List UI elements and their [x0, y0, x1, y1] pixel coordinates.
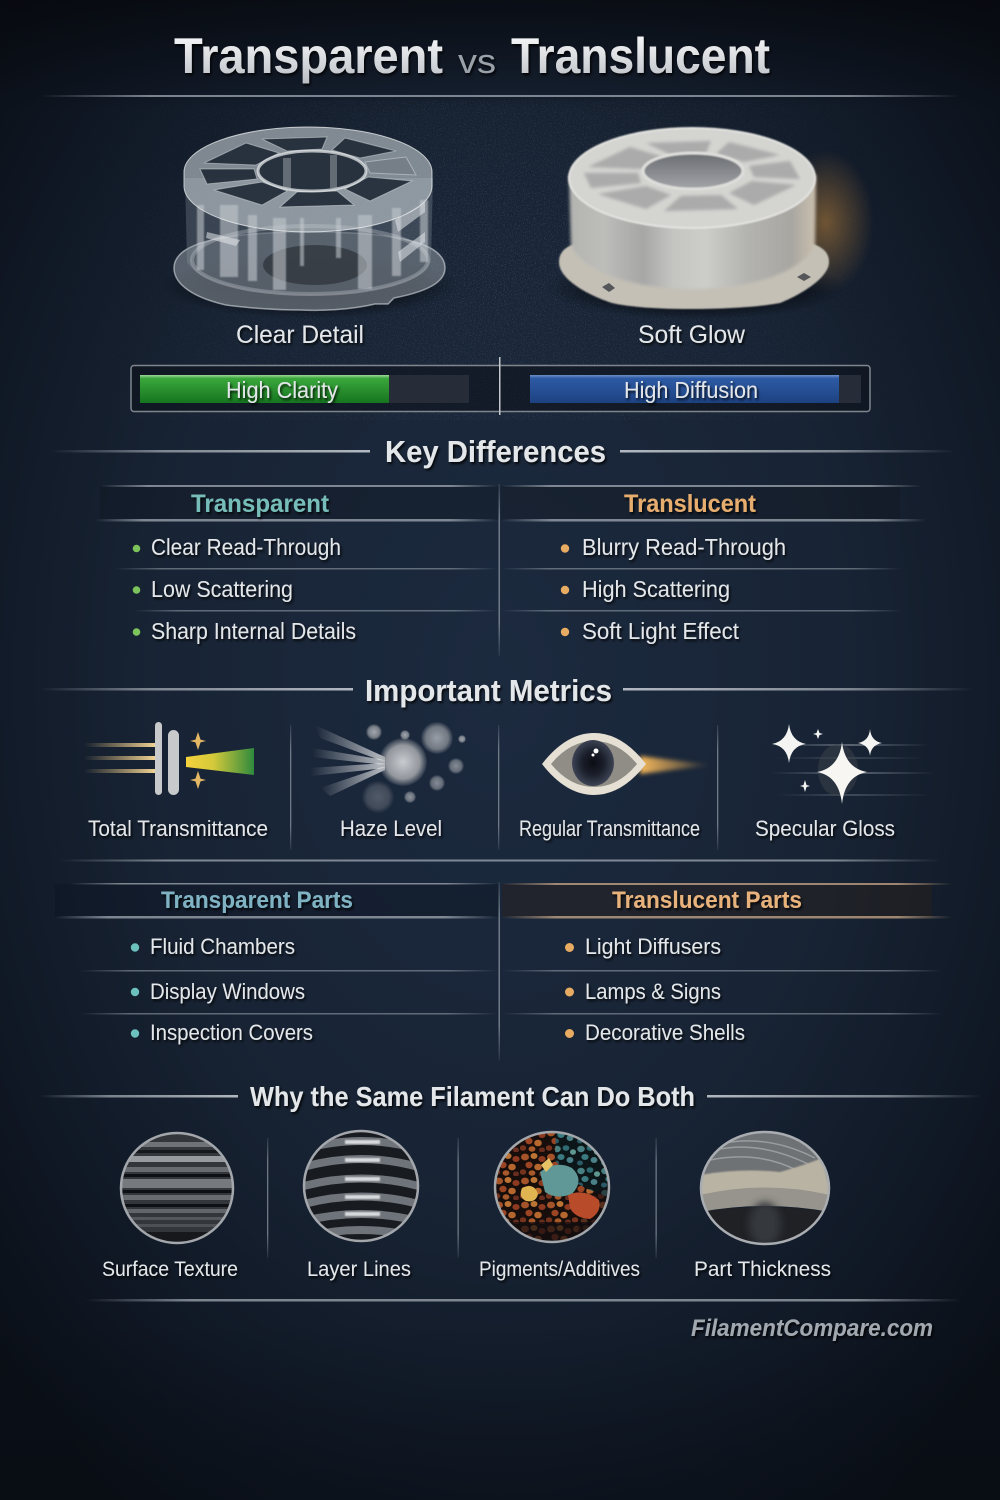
column: transparent parts: Display Windows	[150, 979, 305, 1004]
column: transparent parts: Inspection Covers	[150, 1020, 313, 1045]
high diffusion bar: High Diffusion	[624, 377, 758, 403]
column: translucent: Translucent	[624, 490, 757, 518]
icon: specular gloss	[770, 724, 935, 804]
icon: haze level	[310, 722, 466, 813]
high clarity bar: High Clarity	[226, 377, 338, 403]
label: total transmittance: Total Transmittance	[88, 816, 268, 841]
heading: important metrics: Important Metrics	[365, 673, 612, 708]
column: translucent	[561, 490, 786, 644]
icon: layer lines	[300, 1128, 422, 1244]
product labels	[236, 321, 746, 349]
spool base	[559, 235, 829, 309]
column: translucent parts	[565, 887, 802, 1045]
label: specular gloss: Specular Gloss	[755, 816, 895, 841]
footer brand: FilamentCompare.com	[691, 1315, 933, 1342]
title: Transparent	[174, 28, 443, 84]
icon: regular transmittance eye	[542, 733, 712, 795]
label: surface texture: Surface Texture	[102, 1258, 238, 1281]
product labels: Soft Glow	[638, 321, 746, 349]
spool base flange	[174, 232, 445, 310]
column: translucent: Soft Light Effect	[582, 618, 740, 644]
icon: total transmittance	[84, 722, 254, 795]
transparent spool illustration	[160, 127, 460, 319]
column: transparent	[133, 490, 356, 644]
icon: pigments and additives	[494, 1130, 610, 1244]
column: transparent parts	[131, 887, 353, 1045]
icon: surface texture	[120, 1130, 236, 1246]
heading: why the same filament: Why the Same Filament Can Do Both	[250, 1081, 695, 1112]
label: regular transmittance: Regular Transmittance	[519, 816, 700, 841]
label: haze level: Haze Level	[340, 816, 442, 841]
column: translucent parts: Decorative Shells	[585, 1020, 745, 1045]
spool body	[569, 175, 816, 289]
icon: part thickness	[700, 1130, 830, 1250]
label: layer lines: Layer Lines	[307, 1258, 411, 1281]
label: part thickness: Part Thickness	[694, 1258, 831, 1281]
spool top lattice	[184, 127, 432, 232]
high diffusion bar	[530, 375, 861, 403]
column: transparent: Low Scattering	[151, 576, 293, 602]
spool transparent body	[185, 178, 433, 295]
column: translucent parts: Lamps & Signs	[585, 979, 721, 1004]
title: Translucent	[511, 28, 770, 84]
column: translucent: Blurry Read-Through	[582, 534, 786, 560]
column: transparent parts: Transparent Parts	[161, 887, 353, 914]
column: transparent: Clear Read-Through	[151, 534, 341, 560]
column: transparent: Sharp Internal Details	[151, 618, 356, 644]
column: translucent: High Scattering	[582, 576, 730, 602]
label: pigments and additives: Pigments/Additives	[479, 1258, 640, 1281]
spool top	[569, 128, 815, 228]
panel: factors	[102, 1128, 831, 1281]
column: transparent: Transparent	[191, 490, 330, 518]
translucent spool illustration	[545, 128, 874, 320]
column: translucent parts: Light Diffusers	[585, 934, 721, 959]
panel: key differences table	[95, 484, 926, 656]
column: translucent parts: Translucent Parts	[612, 887, 802, 914]
heading: key differences: Key Differences	[385, 434, 606, 469]
panel: parts table	[55, 882, 952, 1060]
panel: metrics	[84, 722, 935, 850]
title	[174, 28, 770, 84]
clarity and diffusion bars	[131, 357, 870, 415]
product labels: Clear Detail	[236, 321, 364, 349]
high clarity bar	[140, 375, 469, 403]
column: transparent parts: Fluid Chambers	[150, 934, 295, 959]
title: vs	[458, 43, 496, 81]
